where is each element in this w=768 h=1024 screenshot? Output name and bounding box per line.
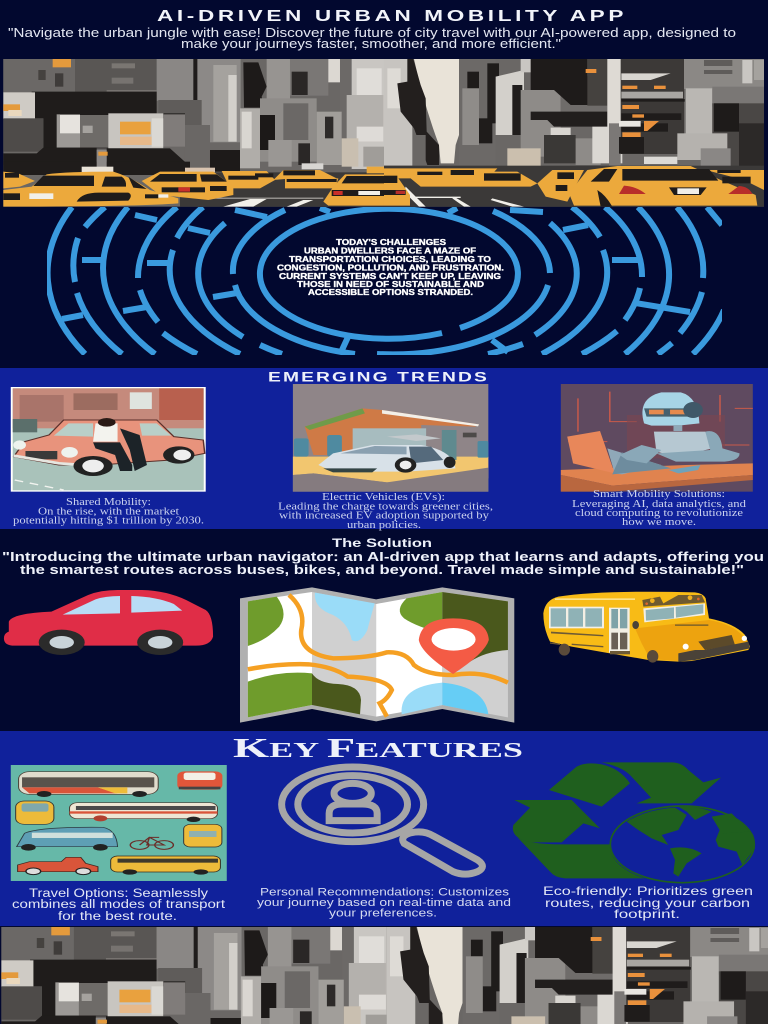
footer image: city street	[1, 927, 768, 1024]
icon: magnifier with person	[282, 767, 482, 874]
heading: emerging trends: EMERGING TRENDS	[268, 370, 489, 384]
hero image: city street with yellow taxis	[3, 59, 764, 207]
icon: folded map with pin	[240, 587, 514, 723]
caption: eco-friendly: Eco-friendly: Prioritizes green	[543, 884, 753, 898]
caption: travel options: combines all modes of transport	[12, 899, 226, 911]
heading: the solution: The Solution	[332, 536, 432, 550]
caption: smart mobility: how we move.	[622, 517, 696, 528]
challenges text: THOSE IN NEED OF SUSTAINABLE AND	[297, 279, 484, 289]
caption: shared mobility	[13, 497, 204, 526]
caption: personal recommendations: Personal Recommendations: Customizes	[260, 886, 510, 898]
caption: travel options: for the best route.	[58, 911, 177, 923]
caption: eco-friendly: footprint.	[614, 907, 680, 921]
panel: key features	[0, 731, 768, 926]
challenges text: CONGESTION, POLLUTION, AND FRUSTRATION.	[277, 262, 504, 272]
challenges text: CURRENT SYSTEMS CAN'T KEEP UP, LEAVING	[279, 271, 501, 281]
solution quote: "Introducing the ultimate urban navigator: an AI-driven app that learns and adapts, offering you	[2, 549, 764, 564]
challenges text: ACCESSIBLE OPTIONS STRANDED.	[308, 287, 473, 297]
maze rings and spokes	[48, 207, 724, 354]
title: AI-DRIVEN URBAN MOBILITY APP	[157, 8, 627, 25]
intro quote: "Navigate the urban jungle with ease! Discover the future of city travel with our AI-powered app, designed to	[8, 26, 736, 40]
caption: eco-friendly	[543, 884, 753, 921]
caption: smart mobility	[572, 489, 746, 528]
icon: red car	[4, 590, 213, 655]
caption: shared mobility: potentially hitting $1 trillion by 2030.	[13, 516, 204, 526]
panel background	[0, 731, 768, 926]
solution quote: the smartest routes across buses, bikes, and beyond. Travel made simple and sustainable!"	[20, 562, 744, 577]
panel: emerging trends	[0, 368, 768, 531]
image: shared mobility car	[11, 387, 206, 492]
caption: smart mobility: Smart Mobility Solutions:	[593, 489, 725, 500]
caption: electric vehicles	[278, 492, 493, 531]
image: transport options collage	[11, 765, 227, 881]
challenges text	[277, 237, 504, 297]
caption: shared mobility: Shared Mobility:	[66, 497, 151, 508]
challenges text: TODAY'S CHALLENGES	[336, 237, 446, 247]
caption: electric vehicles: Leading the charge towards greener cities,	[278, 502, 493, 512]
caption: electric vehicles: urban policies.	[347, 520, 421, 531]
caption: personal recommendations: your journey based on real-time data and	[257, 897, 511, 909]
icon: yellow school bus	[543, 592, 750, 663]
caption: electric vehicles: with increased EV adoption supported by	[279, 510, 489, 522]
challenges text: URBAN DWELLERS FACE A MAZE OF	[304, 246, 476, 256]
panel: today's challenges maze	[48, 207, 724, 354]
heading: key features: K EY F EATURES	[233, 733, 523, 763]
intro quote	[8, 26, 736, 51]
panel: the solution	[2, 536, 764, 723]
caption: travel options	[12, 888, 226, 923]
caption: personal recommendations: your preferences.	[329, 908, 437, 920]
caption: eco-friendly: routes, reducing your carbon	[545, 896, 750, 910]
caption: electric vehicles: Electric Vehicles (EVs):	[322, 492, 445, 503]
image: robot at laptop	[561, 384, 753, 492]
caption: shared mobility: On the rise, with the market	[38, 506, 179, 518]
caption: personal recommendations	[257, 886, 511, 920]
image: electric vehicle charging station	[293, 384, 488, 492]
intro quote: make your journeys faster, smoother, and more efficient."	[181, 37, 561, 51]
panel background	[0, 368, 768, 529]
caption: smart mobility: Leveraging AI, data analytics, and	[572, 499, 746, 510]
challenges text: TRANSPORTATION CHOICES, LEADING TO	[289, 254, 491, 264]
caption: smart mobility: cloud computing to revolutionize	[575, 508, 744, 519]
caption: travel options: Travel Options: Seamlessly	[29, 888, 208, 900]
solution quote	[2, 549, 764, 577]
icon: recycling arrows with globe	[513, 762, 755, 883]
